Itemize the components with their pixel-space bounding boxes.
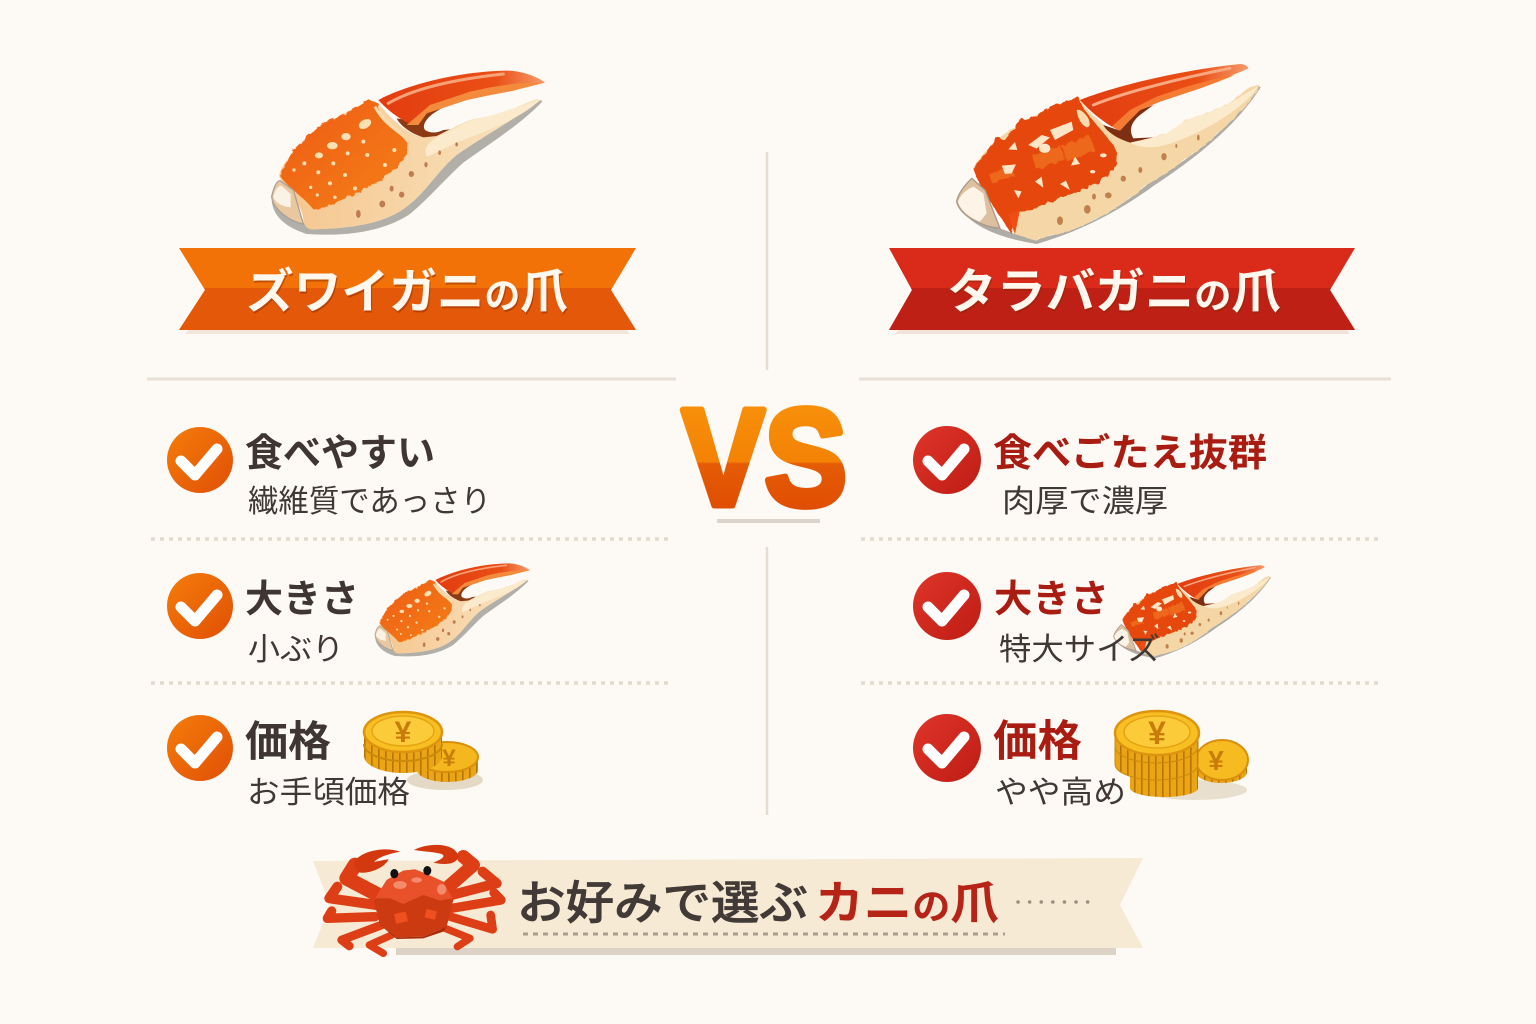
icon: coins: ¥ bbox=[1208, 745, 1224, 776]
text: detail: やや高め bbox=[995, 775, 1126, 810]
banner: king crab claw bbox=[889, 248, 1355, 334]
icon: check bbox=[913, 714, 981, 782]
text: heading: 価格 bbox=[993, 718, 1082, 766]
icon: coins bbox=[364, 712, 483, 790]
VS emblem: VS bbox=[682, 381, 847, 535]
icon: snow crab claw large bbox=[272, 71, 545, 235]
icon: check bbox=[913, 426, 981, 494]
horizontal rules bbox=[147, 378, 1391, 380]
banner: snow crab claw: ズワイガニの爪 bbox=[246, 266, 568, 319]
row: price (king crab) bbox=[913, 711, 1248, 810]
icon: check bbox=[913, 572, 981, 640]
icon: crab bbox=[327, 845, 501, 953]
text: heading: 食べやすい bbox=[245, 433, 435, 475]
text: detail: 肉厚で濃厚 bbox=[1002, 484, 1168, 519]
row: size (king crab) bbox=[913, 565, 1271, 667]
footer ribbon bbox=[313, 845, 1143, 955]
text: footer title bbox=[517, 877, 999, 929]
row: size (snow crab) bbox=[167, 563, 530, 667]
row: easy to eat (snow crab) bbox=[167, 427, 491, 519]
text: heading: 食べごたえ抜群 bbox=[993, 433, 1267, 475]
icon: check bbox=[167, 573, 233, 639]
icon: coins: ¥ bbox=[1148, 715, 1166, 751]
icon: check bbox=[167, 715, 233, 781]
text: footer title: お好みで選ぶ bbox=[517, 877, 808, 929]
text: heading: 大きさ bbox=[994, 579, 1109, 621]
text: detail: 繊維質であっさり bbox=[248, 484, 491, 519]
text: detail: お手頃価格 bbox=[247, 775, 410, 810]
icon: small claw bbox=[1114, 565, 1271, 658]
text: detail: 特大サイズ bbox=[999, 632, 1160, 667]
icon: coins: ¥ bbox=[442, 745, 456, 772]
banner: snow crab claw bbox=[179, 248, 636, 334]
text: heading: 価格 bbox=[245, 718, 331, 765]
icon: small claw bbox=[375, 563, 530, 656]
icon: coins bbox=[1115, 711, 1248, 800]
dotted row separators bbox=[151, 539, 1380, 683]
icon: king crab claw large bbox=[957, 64, 1261, 244]
decorative dots bbox=[1018, 900, 1090, 904]
row: price (snow crab) bbox=[167, 712, 483, 810]
text: detail: 小ぶり bbox=[248, 632, 344, 667]
text: footer title: カニの爪 bbox=[815, 877, 999, 929]
center vertical divider bbox=[766, 152, 768, 815]
icon: coins: ¥ bbox=[395, 716, 412, 749]
text: heading: 大きさ bbox=[245, 579, 359, 621]
icon: check bbox=[167, 427, 233, 493]
banner: king crab claw: タラバガニの爪 bbox=[947, 266, 1281, 319]
row: satisfying to eat (king crab) bbox=[913, 426, 1267, 519]
